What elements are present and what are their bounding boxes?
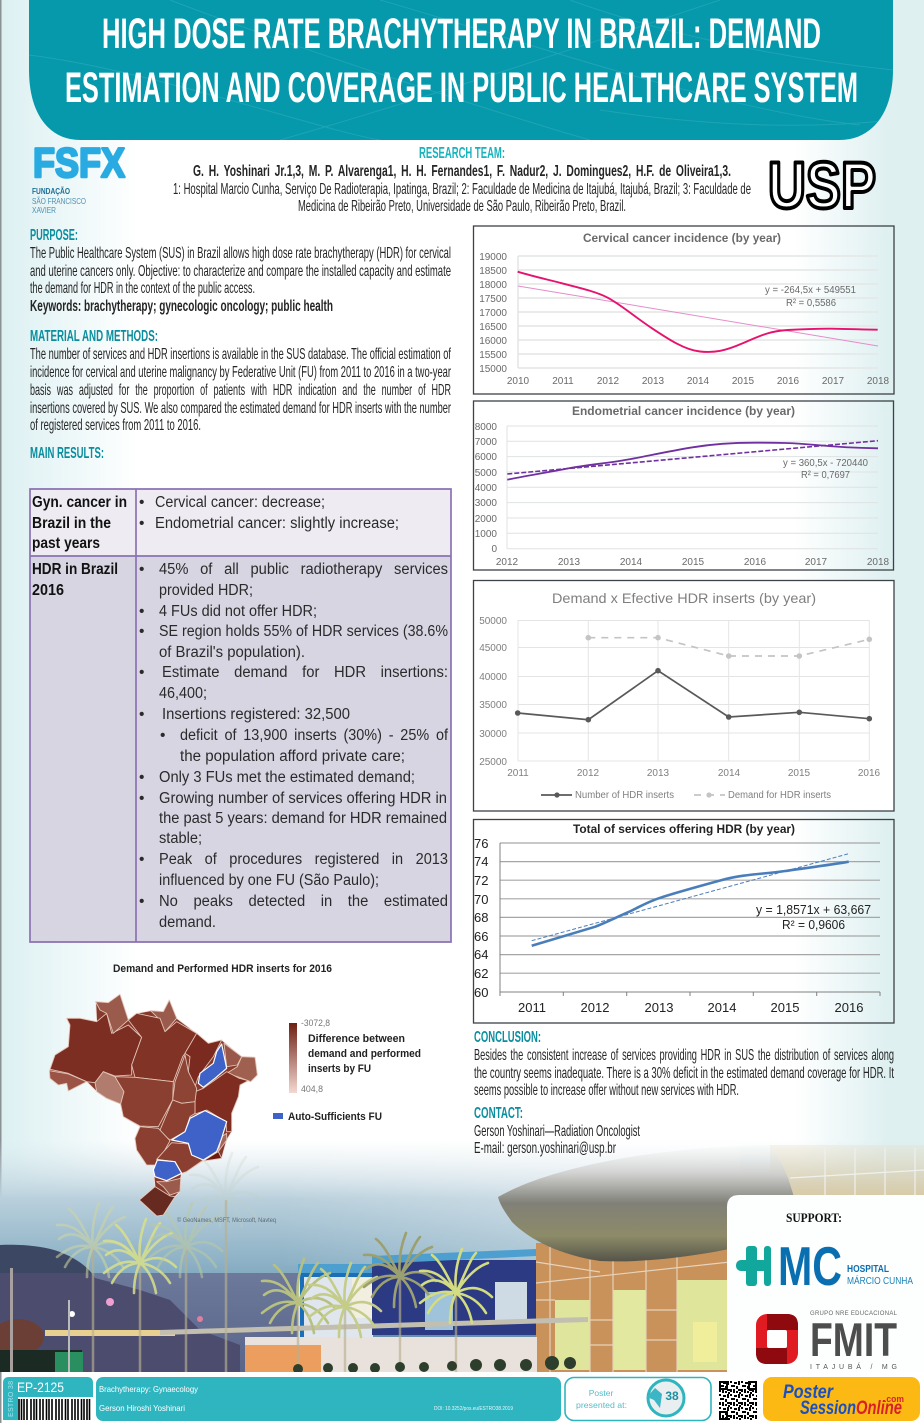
row 2 label: 2016 <box>32 582 64 599</box>
y axis labels: 35000 <box>479 700 507 711</box>
y axis labels: 17000 <box>479 308 507 319</box>
trend line <box>507 441 878 474</box>
y axis labels <box>475 422 497 555</box>
chart: cervical cancer incidence <box>474 226 894 394</box>
panel: purpose <box>30 227 451 315</box>
methods text: of registered services from 2011 to 2016. <box>30 417 201 434</box>
panel: conclusion <box>474 1029 894 1099</box>
x axis labels: 2016 <box>858 768 881 779</box>
map panel <box>49 963 421 1224</box>
map legend caption: Difference between <box>308 1033 405 1045</box>
footer <box>0 1372 924 1423</box>
left edge line repeat <box>0 1372 2 1423</box>
row 2 bullets: demand. <box>159 914 216 931</box>
row 2 bullets: • <box>139 893 144 910</box>
row 2 label <box>32 561 118 599</box>
panel: support <box>727 1195 924 1372</box>
map legend caption: inserts by FU <box>308 1063 371 1075</box>
y axis labels: 62 <box>474 966 488 981</box>
data line <box>507 443 878 480</box>
grid <box>500 843 880 973</box>
light blue building <box>298 1264 374 1353</box>
map legend max: -3072,8 <box>301 1018 330 1028</box>
y axis labels: 3000 <box>475 498 497 509</box>
y axis labels: 76 <box>474 836 488 851</box>
logo: FSFX: SÃO FRANCISCO <box>32 197 86 206</box>
row 2 bullets: Growing number of services offering HDR in <box>159 790 447 807</box>
row 2 bullets: 4 FUs did not offer HDR; <box>159 603 317 620</box>
sky lightening to the right <box>280 1140 740 1265</box>
y axis labels: 15500 <box>479 350 507 361</box>
logo: FSFX <box>32 139 125 215</box>
conclusion heading: CONCLUSION: <box>474 1029 541 1046</box>
presented at box: Poster <box>589 1388 613 1398</box>
panel: material and methods <box>30 328 451 434</box>
x axis labels: 2015 <box>682 557 705 568</box>
y axis labels <box>474 836 488 1000</box>
purpose text: The Public Healthcare System (SUS) in Brazil allows high dose rate brachytherapy (HDR) for cervical <box>30 245 451 262</box>
presented at box: presented at: <box>576 1400 627 1410</box>
methods text <box>30 346 451 434</box>
legend <box>541 790 831 801</box>
y axis labels: 50000 <box>479 616 507 627</box>
chart title: Endometrial cancer incidence (by year) <box>572 404 795 418</box>
street lights <box>10 1268 203 1372</box>
poster session online logo: .com <box>884 1394 904 1404</box>
map of Brazil <box>49 994 257 1216</box>
row 2 bullets: • <box>139 603 144 620</box>
palms <box>57 1153 492 1372</box>
logo: FMIT: FMIT <box>810 1313 897 1366</box>
research team <box>173 145 751 215</box>
y axis labels: 15000 <box>479 364 507 375</box>
map legend caption: demand and performed <box>308 1048 421 1060</box>
chart title: Total of services offering HDR (by year) <box>573 824 795 836</box>
x axis labels: 2015 <box>788 768 811 779</box>
x axis labels: 2013 <box>642 376 665 387</box>
chart frame <box>474 401 894 570</box>
tinted lower band <box>0 1273 300 1372</box>
results table <box>30 489 451 942</box>
x axis labels: 2011 <box>552 376 574 387</box>
legend: Number of HDR inserts <box>575 790 674 801</box>
panel: contact <box>474 1105 640 1157</box>
y axis labels: 72 <box>474 873 488 888</box>
x axis labels: 2011 <box>507 768 529 779</box>
row 2 bullets: influenced by one FU (São Paulo); <box>159 872 379 889</box>
logo: FMIT: GRUPO NRE EDUCACIONAL <box>810 1311 898 1317</box>
session info strip <box>96 1377 561 1421</box>
contact heading: CONTACT: <box>474 1105 523 1122</box>
map legend scale <box>289 1023 297 1093</box>
data line <box>518 272 878 352</box>
x axis labels: 2013 <box>647 768 670 779</box>
axis <box>500 843 880 996</box>
row 2 bullets: the past 5 years: demand for HDR remained <box>159 810 447 827</box>
row 2 bullets: of Brazil's population). <box>159 644 305 661</box>
y axis labels: 0 <box>491 544 497 555</box>
data line <box>532 862 849 946</box>
equation: y = 1,8571x + 63,667 <box>756 902 871 917</box>
y axis labels: 60 <box>474 985 488 1000</box>
equation <box>756 902 871 932</box>
table borders <box>30 489 451 942</box>
logo: FMIT: ITAJUBÁ / MG <box>810 1362 897 1371</box>
green fence <box>0 1350 82 1372</box>
methods text: insertions covered by SUS. We also compared the estimated demand for HDR inserts with the number <box>30 400 451 417</box>
row 2 bullets <box>139 561 449 931</box>
y axis labels: 45000 <box>479 643 507 654</box>
y axis labels: 40000 <box>479 672 507 683</box>
estro badge <box>647 1380 684 1416</box>
y axis labels: 1000 <box>475 529 497 540</box>
y axis labels: 68 <box>474 910 488 925</box>
row 1 label: Brazil in the <box>32 515 111 532</box>
row 2 bullets: Insertions registered: 32,500 <box>162 706 350 723</box>
x axis labels: 2016 <box>835 1000 863 1015</box>
x axis labels: 2017 <box>822 376 845 387</box>
white wall <box>245 1337 537 1372</box>
methods text: basis was adjusted for the proportion of patients with HDR indication and the number of HDR <box>30 382 451 399</box>
x axis labels: 2013 <box>558 557 581 568</box>
row 2 bullets: • <box>139 664 144 681</box>
y axis labels: 16500 <box>479 322 507 333</box>
row 2 bullets: provided HDR; <box>159 582 253 599</box>
y axis labels: 18000 <box>479 280 507 291</box>
x axis labels: 2011 <box>518 1000 546 1015</box>
y axis labels: 8000 <box>475 422 497 433</box>
research team heading: RESEARCH TEAM: <box>419 145 505 162</box>
x axis labels: 2014 <box>620 557 643 568</box>
equation: R² = 0,9606 <box>782 917 845 932</box>
series: number of inserts <box>515 668 872 722</box>
x axis labels <box>507 376 890 387</box>
bottom photo <box>0 1140 924 1375</box>
grid <box>518 620 869 761</box>
tree mass <box>0 1245 240 1372</box>
row 2 bullets: 45% of all public radiotherapy services <box>159 561 448 578</box>
row 1 bullets: Endometrial cancer: slightly increase; <box>155 515 399 532</box>
dark blue building <box>372 1249 536 1335</box>
banner wave lines <box>29 0 893 140</box>
abstract id tag <box>3 1377 93 1420</box>
purpose text: and uterine cancers only. Objective: to characterize and compare the installed capacity and estimate <box>30 263 451 280</box>
x axis labels: 2014 <box>687 376 710 387</box>
map title: Demand and Performed HDR inserts for 2016 <box>113 963 332 975</box>
y axis labels: 6000 <box>475 452 497 463</box>
methods text: incidence for cervical and uterine malignancy by Federative Unit (FU) from 2011 to 2016 in a two-year <box>30 364 451 381</box>
row 1 background <box>30 489 451 556</box>
silver dome <box>498 1145 796 1261</box>
y axis labels: 64 <box>474 947 488 962</box>
y axis labels: 70 <box>474 892 488 907</box>
logo: FSFX: XAVIER <box>32 206 56 215</box>
session info strip: Brachytherapy: Gynaecology <box>99 1384 199 1394</box>
y axis labels: 66 <box>474 929 488 944</box>
poster session online logo: Online <box>856 1398 902 1419</box>
QR code <box>719 1381 757 1420</box>
conclusion text: seems possible to increase offer without new services with HDR. <box>474 1082 739 1099</box>
support background <box>727 1195 924 1372</box>
row 2 bullets: 46,400; <box>159 685 207 702</box>
poster session online logo <box>763 1377 920 1421</box>
legend: Demand for HDR inserts <box>728 790 831 801</box>
x axis labels: 2017 <box>805 557 828 568</box>
abstract id tag: EP-2125 <box>17 1380 64 1395</box>
row 2 bullets: • <box>139 623 144 640</box>
contact email: E-mail: gerson.yoshinari@usp.br <box>474 1140 616 1157</box>
row 1 bullets: • <box>139 494 144 511</box>
contact name: Gerson Yoshinari—Radiation Oncologist <box>474 1123 640 1140</box>
y axis labels: 74 <box>474 854 488 869</box>
y axis labels: 25000 <box>479 757 507 768</box>
x axis labels: 2014 <box>708 1000 736 1015</box>
row 2 bullets: the population afford private care; <box>180 748 405 765</box>
left edge line <box>0 0 2 1423</box>
chart title: Cervical cancer incidence (by year) <box>583 231 781 245</box>
methods text: The number of services and HDR insertions is available in the SUS database. The official estimation of <box>30 346 451 363</box>
barcode <box>19 1399 90 1420</box>
x axis labels: 2012 <box>597 376 620 387</box>
x axis labels: 2018 <box>867 557 890 568</box>
row 2 bullets: Estimate demand for HDR insertions: <box>162 664 448 681</box>
y axis labels: 19000 <box>479 252 507 263</box>
y axis labels: 4000 <box>475 483 497 494</box>
row 1 bullets <box>139 494 399 532</box>
row 1 label <box>32 494 127 552</box>
row 2 bullets: • <box>139 706 144 723</box>
equation <box>765 285 856 309</box>
map attribution: © GeoNames, MSFT, Microsoft, Navteq <box>177 1217 276 1224</box>
logo: HMC: MÁRCIO CUNHA <box>847 1274 913 1287</box>
sky fade <box>0 1140 924 1375</box>
logo: HMC: MC <box>778 1235 842 1297</box>
x axis labels: 2012 <box>496 557 519 568</box>
row 2 bullets: • <box>160 727 165 744</box>
session info strip: DOI: 10.3252/pos.eu/ESTRO38.2019 <box>434 1406 513 1412</box>
x axis labels: 2015 <box>732 376 755 387</box>
presented at box <box>565 1378 711 1420</box>
x axis labels <box>518 1000 863 1015</box>
purpose text <box>30 245 451 315</box>
y axis labels: 2000 <box>475 514 497 525</box>
y axis labels: 18500 <box>479 266 507 277</box>
y axis labels <box>479 252 507 375</box>
abstract id tag: ESTRO 38 <box>8 1381 15 1417</box>
x axis labels: 2016 <box>744 557 767 568</box>
poster session online logo: Poster <box>783 1382 834 1403</box>
chart: demand vs effective inserts <box>474 580 894 811</box>
trend line <box>532 854 849 941</box>
chart frame <box>474 226 894 394</box>
x axis labels: 2015 <box>771 1000 799 1015</box>
chart frame <box>474 820 894 1023</box>
main results heading: MAIN RESULTS: <box>30 445 104 462</box>
estro badge: 38 <box>665 1389 679 1403</box>
affiliations line 2: Medicina de Ribeirão Preto, Universidade de São Paulo, Ribeirão Preto, Brazil. <box>298 198 626 215</box>
legend label: auto-sufficient: Auto-Sufficients FU <box>288 1111 382 1123</box>
row 2 bullets: • <box>139 851 144 868</box>
y axis labels <box>479 616 507 768</box>
purpose heading: PURPOSE: <box>30 227 78 244</box>
chart title: Demand x Efective HDR inserts (by year) <box>552 590 816 606</box>
bushes <box>293 1356 576 1374</box>
row 2 bullets: stable; <box>159 830 202 847</box>
row 2 bullets: • <box>139 790 144 807</box>
row 2 background <box>30 556 451 942</box>
equation: R² = 0,5586 <box>786 298 836 309</box>
x axis labels <box>496 557 890 568</box>
y axis labels: 30000 <box>479 729 507 740</box>
logo: HMC <box>736 1235 913 1297</box>
row 1 bullets: • <box>139 515 144 532</box>
grid <box>518 256 878 368</box>
methods heading: MATERIAL AND METHODS: <box>30 328 158 345</box>
title banner <box>29 0 893 140</box>
row 2 bullets: • <box>139 561 144 578</box>
row 1 bullets: Cervical cancer: decrease; <box>155 494 325 511</box>
legend swatch: auto-sufficient <box>273 1113 283 1119</box>
chart: endometrial cancer incidence <box>474 401 894 570</box>
walkway <box>160 1317 588 1335</box>
x axis labels: 2012 <box>581 1000 609 1015</box>
row 2 bullets: No peaks detected in the estimated <box>159 893 448 910</box>
footer background <box>0 1372 924 1423</box>
x axis labels: 2012 <box>577 768 600 779</box>
row 2 label: HDR in Brazil <box>32 561 118 578</box>
row 1 label: past years <box>32 535 100 552</box>
poster session online logo: Session <box>800 1398 856 1419</box>
x axis labels: 2018 <box>867 376 890 387</box>
x axis labels: 2013 <box>645 1000 673 1015</box>
y axis labels: 5000 <box>475 468 497 479</box>
grid <box>507 426 878 549</box>
logo: USP: USP <box>768 148 876 222</box>
session info strip: Gerson Hiroshi Yoshinari <box>99 1403 185 1413</box>
tan upper facade <box>770 1145 924 1205</box>
orange building <box>536 1240 730 1372</box>
y axis labels: 17500 <box>479 294 507 305</box>
row 2 bullets: • <box>139 769 144 786</box>
row 2 bullets: deficit of 13,900 inserts (30%) - 25% of <box>180 727 449 744</box>
row 2 bullets: SE region holds 55% of HDR services (38.6% <box>159 623 448 640</box>
equation: y = 360,5x - 720440 <box>783 458 868 469</box>
orange wall <box>245 1345 321 1372</box>
purpose text: Keywords: brachytherapy; gynecologic oncology; public health <box>30 298 333 315</box>
row 1 label: Gyn. cancer in <box>32 494 127 511</box>
row 2 bullets: Only 3 FUs met the estimated demand; <box>159 769 415 786</box>
purpose text: the demand for HDR in the context of the public access. <box>30 280 255 297</box>
x axis labels: 2016 <box>777 376 800 387</box>
y axis labels: 16000 <box>479 336 507 347</box>
row 2 bullets: Peak of procedures registered in 2013 <box>159 851 448 868</box>
red foliage <box>0 1319 44 1355</box>
chart frame <box>474 580 894 811</box>
logo: FMIT <box>756 1311 898 1371</box>
equation: R² = 0,7697 <box>801 470 850 481</box>
y axis labels: 7000 <box>475 437 497 448</box>
logo: FSFX: FSFX <box>33 139 125 186</box>
map legend min: 404,8 <box>301 1084 323 1094</box>
x axis labels: 2014 <box>718 768 741 779</box>
support heading: SUPPORT: <box>786 1211 842 1225</box>
chart: total of services <box>474 820 894 1023</box>
logo: HMC: HOSPITAL <box>847 1264 889 1275</box>
trend line <box>518 286 878 346</box>
map legend caption <box>308 1033 421 1075</box>
conclusion text <box>474 1047 894 1099</box>
equation <box>783 458 868 481</box>
x axis labels <box>507 768 881 779</box>
series: demand for inserts <box>586 635 872 659</box>
x axis labels: 2010 <box>507 376 530 387</box>
logo: FSFX: FUNDAÇÃO <box>32 187 70 196</box>
equation: y = -264,5x + 549551 <box>765 285 856 296</box>
